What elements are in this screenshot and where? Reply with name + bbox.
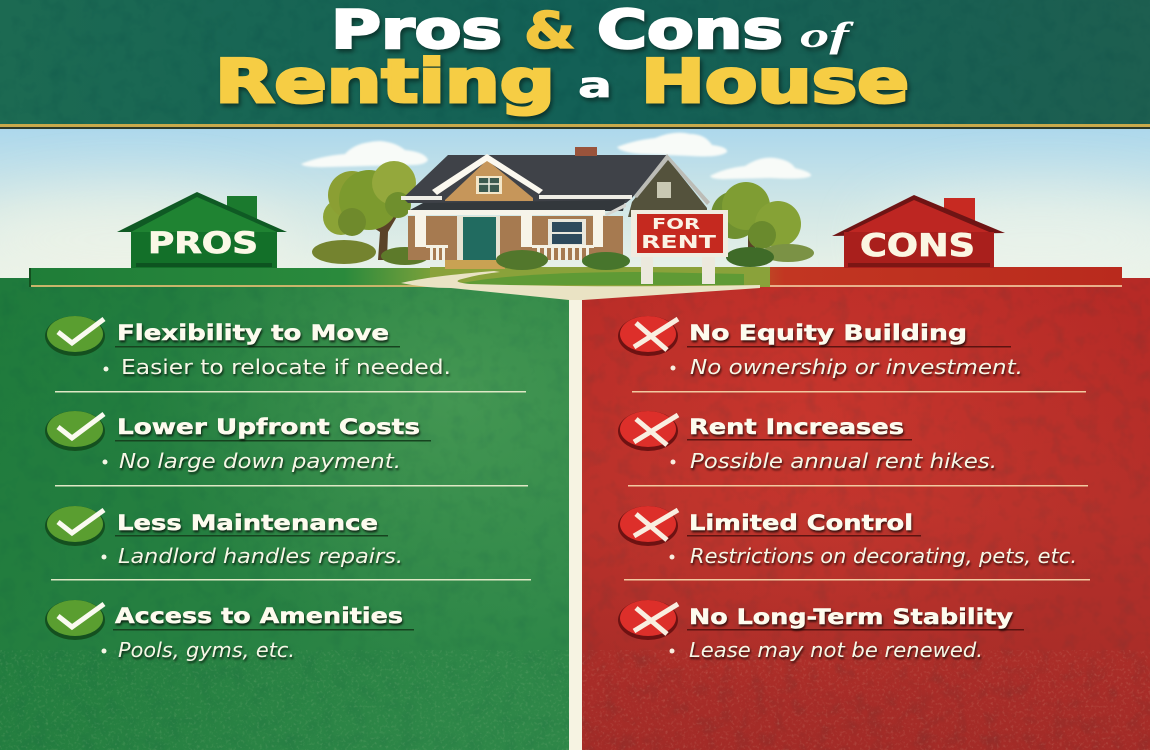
right gable wall (628, 158, 707, 217)
illustration: house (312, 147, 814, 270)
cons house badge (832, 195, 1005, 268)
pro item: less maintenance: Landlord handles repairs. (118, 544, 403, 568)
title: a (578, 66, 612, 106)
gable window (657, 182, 671, 198)
pro item: lower upfront costs: Lower Upfront Costs (117, 415, 420, 439)
cons house badge: CONS (860, 228, 975, 264)
con item: no long-term stability: No Long-Term Stability (689, 605, 1013, 629)
title (215, 0, 909, 117)
window (548, 219, 586, 246)
pro item: lower upfront costs (45, 411, 431, 473)
pro item: less maintenance (45, 506, 403, 568)
front bushes (496, 250, 548, 270)
pro item: access to amenities: Pools, gyms, etc. (118, 638, 295, 662)
con item: rent increases (618, 411, 997, 473)
con item: limited control: Limited Control (689, 511, 913, 535)
title: Renting (215, 47, 555, 117)
cons list (618, 316, 1090, 662)
sky background (0, 129, 1150, 290)
pro item: access to amenities: Access to Amenities (115, 604, 403, 628)
pro item: flexibility to move: Flexibility to Move (117, 321, 389, 345)
tree left (323, 161, 416, 260)
panel: cons background (582, 278, 1150, 750)
panel: pros background (0, 278, 569, 750)
left gable (432, 154, 543, 201)
pros house badge: PROS (148, 226, 258, 260)
title: Cons (597, 0, 783, 61)
pro item: less maintenance: Less Maintenance (117, 511, 378, 535)
main roof (403, 155, 667, 203)
pro item: flexibility to move (45, 316, 451, 379)
columns (415, 215, 603, 247)
ground bars (29, 267, 1122, 300)
pros list (45, 316, 531, 662)
door (457, 216, 500, 260)
pro item: lower upfront costs: No large down payment. (119, 449, 401, 473)
roof trim (401, 195, 632, 200)
bushes (312, 240, 814, 267)
con item: no equity building (618, 316, 1023, 379)
clouds (301, 133, 811, 179)
for rent sign (631, 210, 728, 284)
for rent sign: RENT (641, 232, 717, 253)
con item: no long-term stability: Lease may not be renewed. (689, 638, 983, 662)
tree right (711, 182, 801, 253)
con item: no equity building: No Equity Building (689, 321, 967, 345)
pro item: access to amenities (45, 600, 414, 662)
con item: no equity building: No ownership or investment. (690, 355, 1023, 379)
railings (426, 245, 594, 260)
title: Pros (331, 0, 502, 61)
chimney (575, 147, 597, 156)
header banner (0, 0, 1150, 130)
con item: limited control (618, 506, 1077, 568)
con item: limited control: Restrictions on decorating, pets, etc. (690, 544, 1077, 568)
for rent sign: FOR (652, 215, 701, 233)
house walls (408, 216, 623, 260)
pros house badge (117, 192, 287, 268)
porch roof (408, 200, 625, 211)
steps (445, 260, 505, 269)
center divider (569, 298, 582, 750)
title: House (641, 47, 909, 117)
con item: no long-term stability (618, 600, 1024, 662)
title: of (800, 15, 854, 55)
con item: rent increases: Rent Increases (689, 415, 904, 439)
pro item: flexibility to move: Easier to relocate if needed. (121, 355, 451, 379)
con item: rent increases: Possible annual rent hikes. (690, 449, 997, 473)
title: & (524, 2, 575, 60)
